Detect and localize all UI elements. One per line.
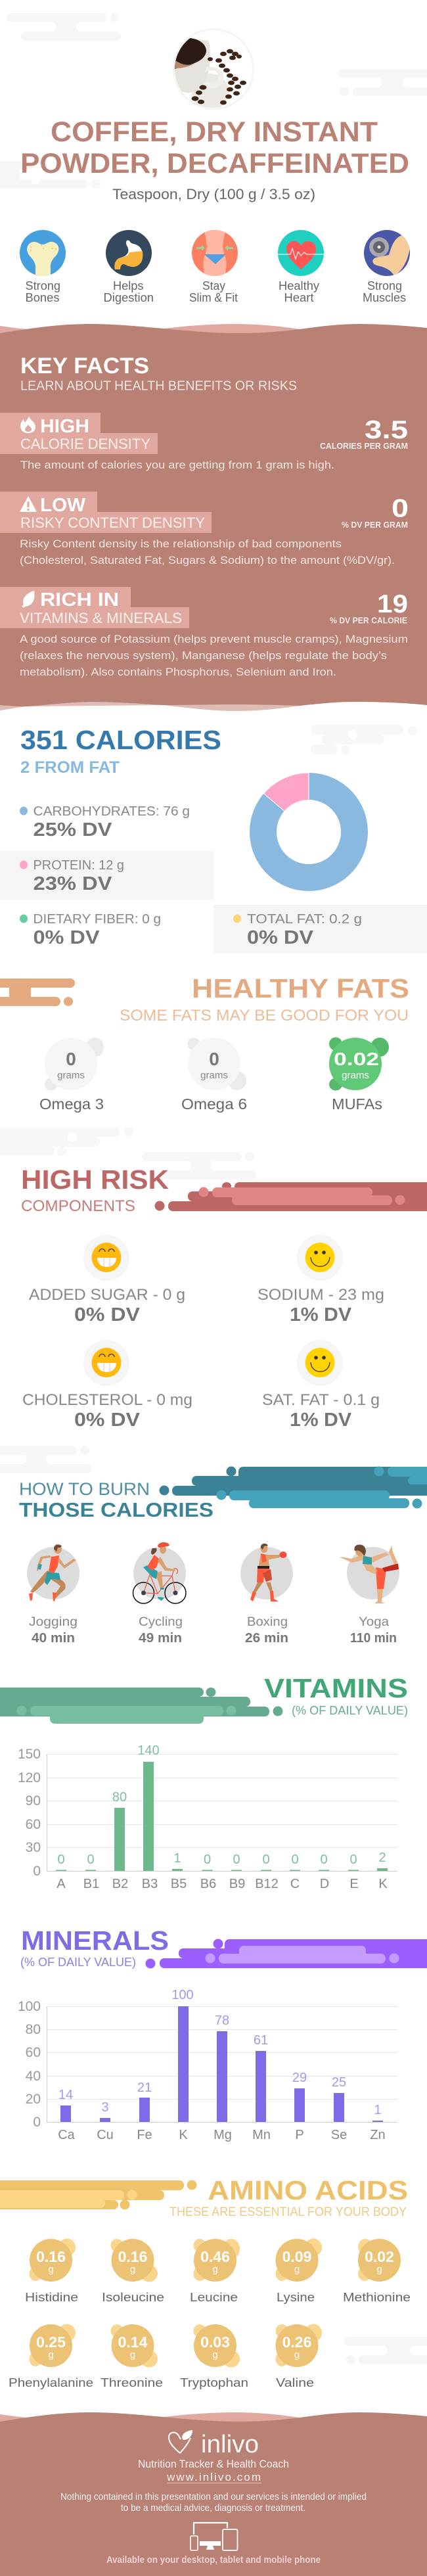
icon: helps digestion — [106, 230, 152, 276]
macro: carbohydrates: CARBOHYDRATES: 76 g — [33, 804, 190, 819]
description — [20, 633, 408, 678]
bar chart: vitamins: 0 — [262, 1852, 270, 1867]
bar chart: vitamins: 0 — [349, 1852, 357, 1867]
activity: yoga — [340, 1545, 399, 1645]
macro: total fat: 0% DV — [247, 927, 314, 948]
panel: footer — [0, 2412, 427, 2576]
bar chart: minerals — [18, 1988, 397, 2142]
disclaimer — [60, 2492, 367, 2514]
subheading: (% OF DAILY VALUE) — [292, 1704, 408, 1717]
bar chart: vitamins: 0 — [87, 1852, 95, 1867]
item: omega 6: 0 — [209, 1049, 219, 1069]
bar chart: minerals: 20 — [26, 2092, 41, 2107]
label: strong muscles — [363, 279, 406, 304]
label: stay slim and fit: Slim & Fit — [189, 291, 238, 304]
heading: amino acids: AMINO ACIDS — [208, 2175, 408, 2205]
bar chart: minerals: 0 — [33, 2115, 41, 2130]
amino: threonine: Threonine — [101, 2376, 163, 2389]
amino: lysine: 0.09 — [282, 2248, 311, 2265]
label: helps digestion: Digestion — [104, 291, 154, 304]
panel: high risk — [21, 1164, 427, 1431]
band: total fat — [214, 905, 427, 954]
activity: jogging: 40 min — [32, 1631, 75, 1645]
macro: dietary fiber — [20, 912, 161, 948]
subheading: components: COMPONENTS — [21, 1197, 135, 1215]
item: saturated fat — [262, 1340, 380, 1431]
label: stay slim and fit — [189, 279, 238, 304]
activity: boxing: Boxing — [247, 1615, 288, 1629]
bar chart: minerals: 14 — [58, 2088, 73, 2102]
macro: carbohydrates — [20, 804, 190, 840]
icon: yoga pose — [340, 1545, 399, 1603]
bar chart: vitamins: B3 — [142, 1877, 158, 1891]
icon: cyclist — [133, 1542, 186, 1603]
macro: dietary fiber: DIETARY FIBER: 0 g — [33, 912, 161, 927]
bar chart: minerals: Se — [331, 2128, 347, 2142]
activity: cycling: 49 min — [139, 1631, 182, 1645]
amino: histidine: Histidine — [25, 2290, 78, 2304]
fact: rich in vitamins and minerals — [0, 587, 408, 678]
bar chart: minerals: 1 — [374, 2103, 382, 2117]
bar chart: minerals: 40 — [26, 2069, 41, 2084]
heading: how to burn: HOW TO BURN — [19, 1479, 150, 1499]
logo: inlivo heart — [169, 2430, 192, 2453]
item: mufas: 0.02 — [334, 1049, 379, 1069]
description: metabolism). Also contains Phosphorus, Selenium and Iron. — [20, 666, 336, 678]
amino: methionine: g — [376, 2264, 382, 2275]
title — [20, 116, 409, 179]
label: calorie density: CALORIE DENSITY — [20, 436, 150, 452]
bar chart: vitamins: 120 — [18, 1770, 41, 1785]
heading: healthy fats: HEALTHY FATS — [192, 973, 409, 1003]
bar chart: vitamins: B1 — [83, 1877, 99, 1891]
item: mufas — [329, 1037, 389, 1113]
macro: dietary fiber: 0% DV — [33, 927, 100, 948]
decoration: green bars — [0, 1688, 282, 1724]
bar chart: minerals: 29 — [292, 2071, 307, 2085]
bar chart: vitamins: B5 — [171, 1877, 187, 1891]
activity: boxing — [240, 1544, 293, 1645]
amino: tryptophan: Tryptophan — [180, 2376, 248, 2389]
bar chart: vitamins: 0 — [33, 1864, 41, 1879]
label: strong bones: Bones — [25, 291, 59, 304]
decoration: purple bars — [146, 1939, 427, 1969]
item: sodium: 1% DV — [290, 1304, 352, 1325]
icon: healthy heart — [278, 230, 324, 276]
bar chart: minerals: Mn — [252, 2128, 271, 2142]
bar chart: vitamins: K — [378, 1877, 388, 1891]
bar chart: vitamins: C — [290, 1877, 300, 1891]
amino: tryptophan: 0.03 — [200, 2334, 230, 2351]
icon: coffee cup photo — [171, 26, 256, 112]
benefit icons row — [20, 229, 411, 304]
item: saturated fat: SAT. FAT - 0.1 g — [262, 1391, 380, 1409]
subtitle: serving size: Teaspoon, Dry (100 g / 3.5 oz) — [112, 186, 315, 202]
bar chart: vitamins: 0 — [233, 1852, 240, 1867]
bar chart: vitamins: 150 — [18, 1747, 41, 1762]
icon: stay slim and fit — [192, 229, 238, 279]
bar chart: minerals: 21 — [137, 2081, 152, 2095]
bar chart: vitamins: E — [349, 1877, 359, 1891]
panel: minerals — [18, 1925, 427, 2142]
item: omega 3: grams — [57, 1070, 85, 1081]
amino: valine: 0.26 — [282, 2334, 311, 2351]
macro: protein: PROTEIN: 12 g — [33, 858, 124, 873]
fact: low risky content density — [0, 492, 409, 566]
amino: histidine — [25, 2238, 78, 2304]
bar chart: minerals: K — [179, 2128, 188, 2142]
item: mufas: grams — [342, 1070, 369, 1081]
activity: jogging: Jogging — [29, 1615, 78, 1629]
description: (relaxes the nervous system), Manganese (helps regulate the body’s — [20, 649, 387, 662]
bar chart: vitamins: B9 — [229, 1877, 245, 1891]
bar chart: vitamins: 140 — [137, 1743, 160, 1758]
amino: phenylalanine — [9, 2324, 93, 2389]
icon: runner — [29, 1544, 76, 1601]
item: added sugar: 0% DV — [74, 1304, 141, 1325]
bar chart: minerals: Cu — [97, 2128, 114, 2142]
description: A good source of Potassium (helps prevent muscle cramps), Magnesium — [20, 633, 408, 645]
website link: www.inlivo.com — [166, 2471, 261, 2483]
label: strong bones — [25, 279, 60, 304]
amino: isoleucine — [102, 2239, 164, 2304]
amino: phenylalanine: 0.25 — [36, 2334, 66, 2351]
macro: total fat — [233, 912, 362, 948]
label: healthy heart: Healthy — [279, 279, 319, 292]
item: omega 6: grams — [200, 1070, 228, 1081]
label: strong muscles: Strong — [367, 279, 402, 292]
bar chart: minerals: Ca — [58, 2128, 76, 2142]
bar chart: minerals: 100 — [18, 1999, 41, 2014]
icon: strong muscles — [364, 230, 411, 276]
description: Risky Content density is the relationship of bad components — [20, 538, 342, 550]
heading: minerals: MINERALS — [21, 1925, 169, 1956]
amino: threonine: 0.14 — [118, 2334, 148, 2351]
bar chart: vitamins — [18, 1743, 397, 1891]
logo: inlivo wordmark: inlivo — [201, 2431, 259, 2458]
bar chart: minerals: 3 — [101, 2100, 109, 2115]
value: 0: 0 — [392, 494, 409, 523]
unit: % DV PER GRAM — [342, 520, 408, 530]
fact: high calorie density — [0, 413, 408, 471]
macro: carbohydrates: 25% DV — [33, 819, 112, 840]
item: omega 6: Omega 6 — [181, 1095, 247, 1113]
bar chart: minerals: 25 — [332, 2075, 346, 2090]
bar chart: vitamins: B6 — [200, 1877, 216, 1891]
donut chart — [250, 773, 368, 891]
bar chart: vitamins: 2 — [378, 1851, 386, 1865]
icon: flame — [20, 416, 35, 433]
bar chart: vitamins: 1 — [173, 1851, 181, 1866]
band: protein — [0, 851, 214, 900]
bar chart: minerals: 61 — [254, 2033, 268, 2048]
bar chart: vitamins: 0 — [57, 1852, 65, 1867]
bar chart: minerals: P — [295, 2128, 304, 2142]
amino: methionine: 0.02 — [365, 2248, 394, 2265]
amino: lysine: g — [294, 2264, 300, 2275]
item: saturated fat: 1% DV — [290, 1410, 352, 1431]
bar chart: vitamins: B2 — [112, 1877, 128, 1891]
label: strong muscles: Muscles — [363, 291, 406, 304]
description — [20, 538, 395, 566]
unit: CALORIES PER GRAM — [320, 442, 408, 451]
item: sodium: SODIUM - 23 mg — [258, 1286, 384, 1304]
label: strong bones: Strong — [25, 279, 60, 292]
activity: yoga: 110 min — [350, 1631, 397, 1645]
availability note: Available on your desktop, tablet and mobile phone — [106, 2555, 321, 2565]
decoration: orange bars — [0, 978, 75, 1006]
bar chart: vitamins: B12 — [255, 1877, 279, 1891]
heading: those calories: THOSE CALORIES — [19, 1498, 214, 1521]
label: vitamins and minerals: VITAMINS & MINERALS — [20, 610, 182, 626]
activity: yoga: Yoga — [359, 1615, 389, 1629]
panel: calories — [0, 725, 427, 954]
title: COFFEE, DRY INSTANT — [51, 116, 378, 148]
amino: valine: Valine — [276, 2376, 314, 2389]
item: omega 3: 0 — [66, 1049, 76, 1069]
bar chart: vitamins: 30 — [26, 1840, 41, 1855]
item: added sugar — [29, 1235, 185, 1325]
activity: cycling — [133, 1542, 186, 1645]
amino: valine: g — [294, 2349, 300, 2360]
amino: tryptophan: g — [212, 2349, 218, 2360]
amino: isoleucine: 0.16 — [118, 2248, 147, 2265]
subheading: SOME FATS MAY BE GOOD FOR YOU — [120, 1007, 409, 1024]
bar chart: vitamins: A — [56, 1877, 66, 1891]
icon: devices — [191, 2523, 238, 2550]
label: helps digestion — [104, 279, 154, 304]
decoration: teal bars — [159, 1467, 427, 1509]
bar chart: vitamins: 0 — [291, 1852, 299, 1867]
amino: lysine: Lysine — [277, 2290, 315, 2304]
label: healthy heart: Heart — [284, 291, 314, 304]
title: POWDER, DECAFFEINATED — [20, 148, 409, 179]
disclaimer: Nothing contained in this presentation and our services is intended or implied — [60, 2492, 367, 2502]
heading: vitamins: VITAMINS — [264, 1673, 408, 1703]
bar chart: vitamins: 60 — [26, 1817, 41, 1832]
item: omega 3: Omega 3 — [39, 1095, 104, 1113]
panel: vitamins — [0, 1673, 408, 1891]
icon: strong bones — [20, 230, 66, 279]
amino: threonine — [101, 2324, 163, 2389]
label: low: LOW — [40, 495, 86, 516]
amino: leucine — [190, 2239, 240, 2304]
bar chart: minerals: 100 — [171, 1988, 194, 2002]
disclaimer: to be a medical advice, diagnosis or treatment. — [121, 2503, 305, 2514]
bar chart: vitamins: 0 — [204, 1852, 211, 1867]
amino: histidine: g — [48, 2264, 54, 2275]
subheading: THESE ARE ESSENTIAL FOR YOUR BODY — [169, 2205, 407, 2219]
item: omega 6 — [181, 1038, 247, 1113]
label: risky content density: RISKY CONTENT DENSITY — [20, 515, 205, 531]
amino: lysine — [276, 2238, 322, 2304]
description: The amount of calories you are getting from 1 gram is high. — [20, 459, 334, 471]
bar chart: vitamins: 80 — [112, 1790, 127, 1805]
unit: % DV PER CALORIE — [330, 616, 407, 626]
bar chart: vitamins: 90 — [26, 1793, 41, 1808]
label: rich in: RICH IN — [40, 589, 119, 610]
amino: methionine — [343, 2239, 411, 2304]
panel: amino acids — [0, 2175, 411, 2389]
bar chart: minerals: Zn — [370, 2128, 386, 2142]
macro: protein: 23% DV — [33, 873, 112, 894]
bar chart: vitamins: 0 — [320, 1852, 328, 1867]
panel: key facts — [0, 324, 427, 711]
item: cholesterol: 0% DV — [74, 1410, 141, 1431]
icon: leaf — [22, 591, 34, 608]
description: (Cholesterol, Saturated Fat, Sugars & Sodium) to the amount (%DV/gr). — [20, 554, 395, 566]
icon: warning triangle — [20, 496, 37, 512]
panel: how to burn those calories — [19, 1467, 427, 1645]
label: healthy heart — [279, 279, 319, 304]
subheading: LEARN ABOUT HEALTH BENEFITS OR RISKS — [20, 379, 297, 393]
heading: key facts: KEY FACTS — [20, 354, 149, 379]
activity: boxing: 26 min — [245, 1631, 288, 1645]
activity: jogging — [27, 1544, 79, 1645]
heading: 351 calories: 351 CALORIES — [20, 725, 221, 755]
item: sodium — [258, 1235, 384, 1325]
decoration: red bars — [155, 1182, 427, 1211]
label: helps digestion: Helps — [113, 279, 143, 292]
tagline: Nutrition Tracker & Health Coach — [138, 2458, 289, 2470]
bar chart: minerals: 80 — [26, 2022, 41, 2037]
amino: isoleucine: g — [130, 2264, 135, 2275]
item: cholesterol — [22, 1340, 192, 1431]
amino: histidine: 0.16 — [36, 2248, 66, 2265]
bar chart: minerals: 78 — [215, 2013, 229, 2028]
amino: leucine: 0.46 — [200, 2248, 230, 2265]
bar chart: minerals: 60 — [26, 2045, 41, 2060]
value: 3.5: 3.5 — [365, 416, 408, 444]
macro: total fat: TOTAL FAT: 0.2 g — [247, 912, 362, 927]
item: omega 3 — [39, 1038, 104, 1113]
decoration: yellow bars — [0, 2180, 197, 2209]
bar chart: vitamins: D — [320, 1877, 329, 1891]
amino: isoleucine: Isoleucine — [102, 2290, 164, 2304]
item: mufas: MUFAs — [332, 1095, 382, 1113]
amino: leucine: g — [212, 2264, 218, 2275]
amino: threonine: g — [130, 2349, 135, 2360]
subheading: (% OF DAILY VALUE) — [20, 1956, 136, 1969]
item: cholesterol: CHOLESTEROL - 0 mg — [22, 1391, 192, 1409]
bar chart: minerals: Mg — [214, 2128, 232, 2142]
panel: healthy fats — [0, 973, 409, 1113]
macro: protein — [20, 858, 124, 894]
amino: phenylalanine: Phenylalanine — [9, 2376, 93, 2389]
bar chart: minerals: Fe — [137, 2128, 152, 2142]
item: added sugar: ADDED SUGAR - 0 g — [29, 1286, 185, 1304]
heading: high risk: HIGH RISK — [21, 1164, 169, 1195]
icon: boxer — [250, 1544, 286, 1601]
activity: cycling: Cycling — [139, 1615, 183, 1629]
amino: phenylalanine: g — [48, 2349, 54, 2360]
amino: methionine: Methionine — [343, 2290, 411, 2304]
label: stay slim and fit: Stay — [202, 279, 225, 292]
amino: valine — [276, 2324, 322, 2389]
subheading: from fat: 2 FROM FAT — [20, 758, 120, 777]
label: high: HIGH — [40, 416, 89, 437]
amino: leucine: Leucine — [190, 2290, 238, 2304]
amino: tryptophan — [180, 2324, 248, 2389]
value: 19: 19 — [377, 590, 408, 618]
